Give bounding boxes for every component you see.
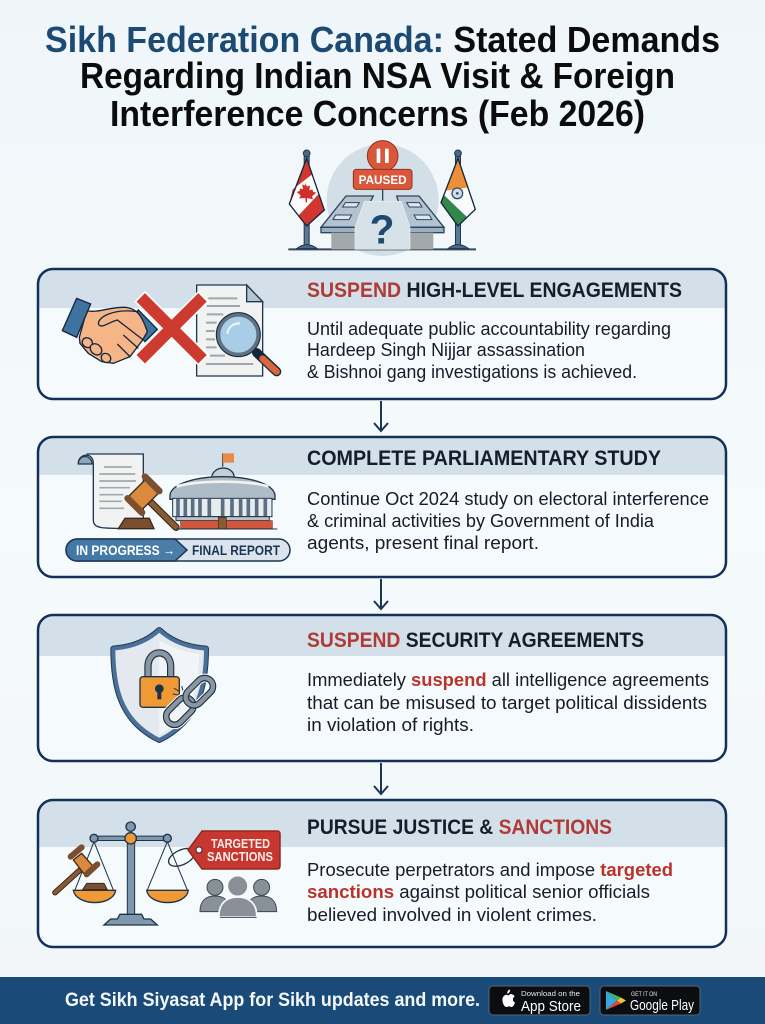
- footer bar: [0, 977, 765, 1024]
- title: Interference Concerns (Feb 2026): [110, 93, 645, 134]
- description: [307, 318, 671, 382]
- icon: Canadian flag: [289, 150, 324, 249]
- arrow: [374, 763, 388, 794]
- title: Regarding Indian NSA Visit & Foreign: [80, 55, 675, 96]
- App Store label: App Store: [521, 998, 581, 1015]
- tag: targeted sanctions: [188, 831, 280, 869]
- play icon: [606, 991, 626, 1010]
- arrow: [374, 401, 388, 431]
- Google Play small label: GET IT ON: [631, 991, 657, 998]
- question mark: ?: [370, 206, 394, 252]
- icon: pause button: [367, 141, 398, 171]
- tag line 1: TARGETED: [211, 836, 270, 851]
- icon: handshake crossed out with document and magnifier: [62, 285, 277, 376]
- panel: suspend high-level engagements: [38, 269, 726, 399]
- description: [307, 859, 673, 925]
- description: agents, present final report.: [307, 532, 539, 553]
- description: Continue Oct 2024 study on electoral interference: [307, 488, 709, 509]
- Google Play label: Google Play: [630, 998, 695, 1014]
- panel: suspend security agreements: [38, 615, 726, 761]
- progress pill: in progress to final report: [66, 539, 290, 561]
- description: Hardeep Singh Nijjar assassination: [307, 339, 585, 360]
- App Store badge: [489, 986, 590, 1015]
- description: believed involved in violent crimes.: [307, 904, 597, 925]
- icon: scales of justice, gavel, tag and people: [55, 822, 277, 925]
- description: [307, 488, 709, 553]
- tag line 2: SANCTIONS: [207, 849, 273, 864]
- description: in violation of rights.: [307, 714, 474, 735]
- title: Sikh Federation Canada: Stated Demands: [45, 19, 720, 60]
- heading: PURSUE JUSTICE & SANCTIONS: [307, 815, 612, 839]
- final report label: FINAL REPORT: [192, 542, 280, 558]
- heading: COMPLETE PARLIAMENTARY STUDY: [307, 446, 661, 470]
- panel: pursue justice and sanctions: [38, 800, 726, 947]
- Google Play badge: [600, 986, 700, 1015]
- icon: shield with padlock and broken chain: [113, 630, 216, 740]
- icon: negotiating table: [321, 196, 444, 249]
- title: [45, 19, 720, 134]
- footer call to action: Get Sikh Siyasat App for Sikh updates and more.: [65, 989, 480, 1011]
- description: sanctions against political senior officials: [307, 881, 650, 902]
- arrow: [374, 579, 388, 609]
- in progress label: IN PROGRESS →: [76, 542, 175, 558]
- description: Until adequate public accountability regarding: [307, 318, 671, 339]
- description: [307, 669, 709, 735]
- heading: SUSPEND HIGH-LEVEL ENGAGEMENTS: [307, 278, 682, 302]
- icon: Indian flag: [441, 150, 475, 249]
- icon: scroll, gavel and parliament: [78, 453, 277, 529]
- paused label: PAUSED: [359, 174, 407, 187]
- description: & Bishnoi gang investigations is achieved.: [307, 361, 637, 382]
- description: that can be misused to target political dissidents: [307, 692, 707, 713]
- description: Prosecute perpetrators and impose targeted: [307, 859, 673, 880]
- heading: SUSPEND SECURITY AGREEMENTS: [307, 628, 644, 652]
- description: & criminal activities by Government of India: [307, 510, 655, 531]
- App Store small label: Download on the: [521, 991, 580, 998]
- paused label: [353, 169, 412, 189]
- description: Immediately suspend all intelligence agreements: [307, 669, 709, 690]
- apple icon: [502, 990, 515, 1007]
- hero icon: paused talks between Canada and India: [288, 141, 476, 256]
- panel: complete parliamentary study: [38, 437, 726, 577]
